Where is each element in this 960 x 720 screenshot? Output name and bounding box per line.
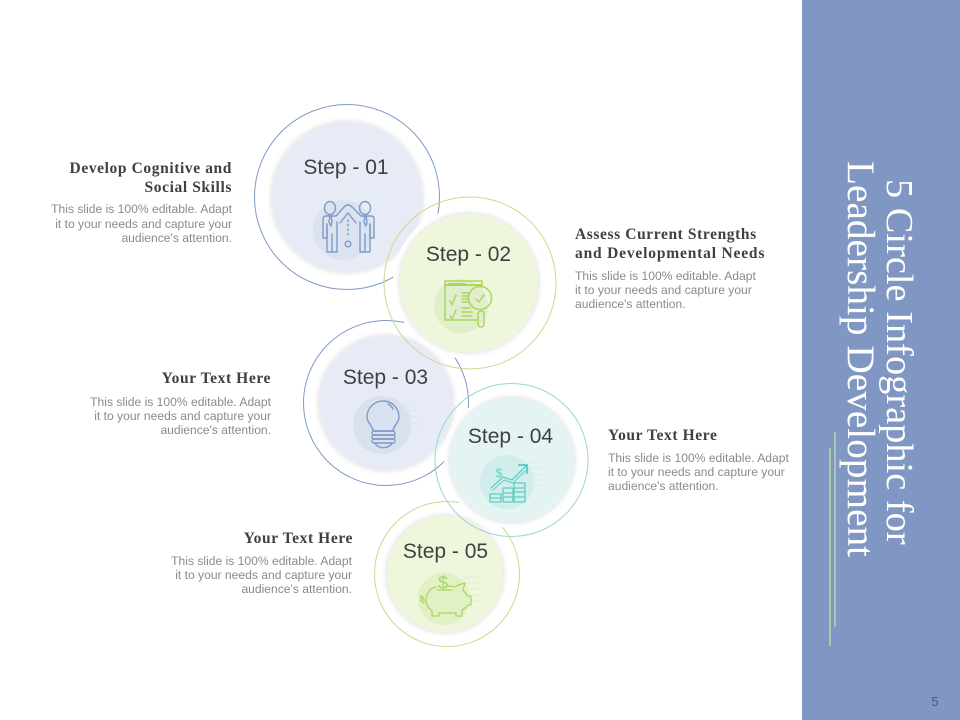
circle: step 04 <box>435 384 588 536</box>
side panel <box>802 0 960 720</box>
text block: step 01 <box>51 160 233 245</box>
icon: checklist with magnifier <box>434 279 492 333</box>
circle: step 05 <box>374 502 520 646</box>
text block: step 05: Your Text Here <box>244 530 353 547</box>
text block: step 03 <box>90 370 272 437</box>
text block: step 02: This slide is 100% editable. Adapt <box>575 269 756 283</box>
circle: step 04: Step - 04 <box>468 425 553 448</box>
circle: step 01 <box>254 104 440 290</box>
icon: piggy bank: $ <box>438 573 448 593</box>
icon: two people high five <box>313 200 374 260</box>
text block: step 02: it to your needs and capture your <box>575 283 752 297</box>
text block: step 02 <box>575 226 765 311</box>
circle: step 03 <box>304 320 468 486</box>
text block: step 03: Your Text Here <box>162 370 271 387</box>
text block: step 04: This slide is 100% editable. Adapt <box>608 451 789 465</box>
text block: step 01: it to your needs and capture your <box>55 217 232 231</box>
text block: step 04: it to your needs and capture your <box>608 465 785 479</box>
text block: step 05: This slide is 100% editable. Adapt <box>171 554 353 568</box>
circle: step 03: Step - 03 <box>343 366 428 389</box>
text block: step 04 <box>608 427 789 493</box>
text block: step 03: This slide is 100% editable. Adapt <box>90 395 272 409</box>
circle: step 02: Step - 02 <box>426 243 511 266</box>
text block: step 02: Assess Current Strengths <box>575 226 757 243</box>
circle: step 01: Step - 01 <box>303 156 389 179</box>
text block: step 01: This slide is 100% editable. Adapt <box>51 202 233 216</box>
accent lines <box>830 432 835 646</box>
text block: step 01: audience's attention. <box>121 231 232 245</box>
text block: step 01: Develop Cognitive and <box>70 160 232 177</box>
text block: step 03: audience's attention. <box>160 423 271 437</box>
text block: step 02: audience's attention. <box>575 297 686 311</box>
text block: step 05 <box>171 530 353 596</box>
text block: step 04: audience's attention. <box>608 479 719 493</box>
slide title <box>839 161 920 557</box>
text block: step 05: it to your needs and capture your <box>175 568 352 582</box>
circle: step 05: Step - 05 <box>403 540 488 563</box>
text block: step 05: audience's attention. <box>241 582 352 596</box>
page number: 5 <box>931 694 939 709</box>
icon: light bulb <box>353 396 421 454</box>
icon: growth chart <box>480 455 547 509</box>
text block: step 02: and Developmental Needs <box>575 245 765 262</box>
text block: step 04: Your Text Here <box>608 427 717 444</box>
text block: step 03: it to your needs and capture your <box>94 409 271 423</box>
slide title: Leadership Development <box>839 161 883 557</box>
circle: step 02 <box>384 197 556 369</box>
icon: growth chart: $ <box>496 466 503 480</box>
text block: step 01: Social Skills <box>145 179 232 196</box>
slide title: 5 Circle Infographic for <box>878 179 920 545</box>
icon: piggy bank <box>418 573 485 625</box>
